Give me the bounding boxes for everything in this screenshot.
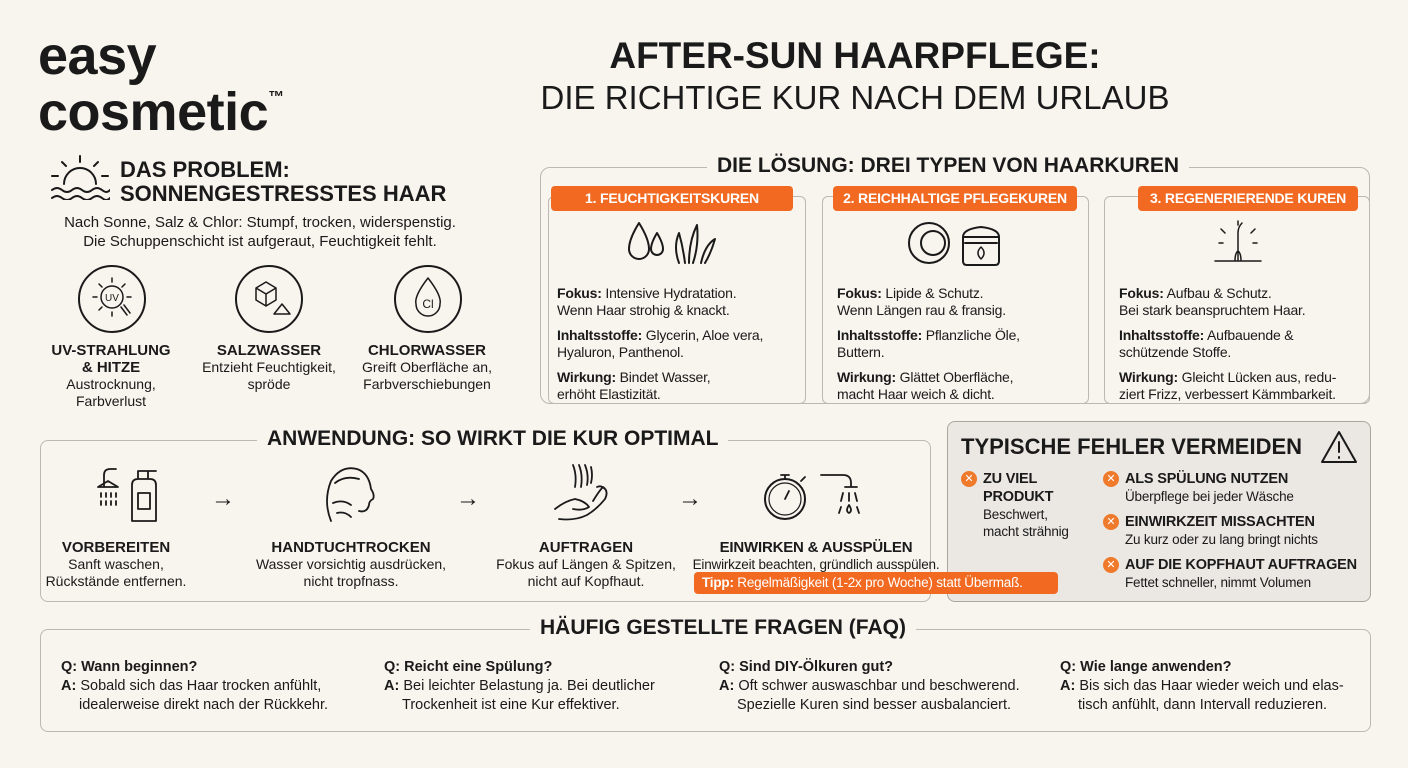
- text: card 2: Buttern.: [837, 344, 884, 360]
- icon: chlorine: Cl: [422, 297, 434, 311]
- heading: solution: DIE LÖSUNG: DREI TYPEN VON HAARKUREN: [717, 154, 1179, 177]
- faq 4: tisch anfühlt, dann Intervall reduzieren.: [1078, 697, 1327, 713]
- text: card 1: Wirkung: Bindet Wasser,: [557, 369, 710, 385]
- faq 1: idealerweise direkt nach der Rückkehr.: [79, 697, 328, 713]
- mistake 1: macht strähnig: [983, 524, 1069, 539]
- mistake 2: Überpflege bei jeder Wäsche: [1125, 489, 1294, 504]
- faq 1: [61, 659, 328, 713]
- card 1: [548, 196, 806, 404]
- mistake 4: AUF DIE KOPFHAUT AUFTRAGEN: [1125, 557, 1357, 573]
- panel: application: [40, 440, 931, 602]
- step 3: AUFTRAGEN: [539, 539, 633, 556]
- tag 3: [1138, 186, 1358, 211]
- text: card 1: Fokus: Intensive Hydratation.: [557, 285, 736, 301]
- arrow 2: →: [456, 485, 480, 512]
- label: UV: UV-STRAHLUNG: [51, 342, 171, 359]
- faq 2: Trockenheit ist eine Kur effektiver.: [402, 697, 620, 713]
- title: DIE RICHTIGE KUR NACH DEM URLAUB: [541, 79, 1169, 116]
- faq 2: [384, 659, 655, 713]
- title: [541, 35, 1169, 116]
- icon: timer and shower: [764, 474, 860, 520]
- logo: easy: [38, 26, 156, 86]
- mistake 1: ✕: [964, 473, 974, 485]
- text: card 2: [837, 285, 1020, 402]
- label: UV: [51, 342, 171, 409]
- mistake 3: EINWIRKZEIT MISSACHTEN: [1125, 514, 1315, 530]
- label: salt: SALZWASSER: [217, 342, 321, 359]
- faq 4: A: Bis sich das Haar wieder weich und elas-: [1060, 678, 1344, 694]
- faq 1: A: Sobald sich das Haar trocken anfühlt,: [61, 678, 321, 694]
- step 3: Fokus auf Längen & Spitzen,: [496, 556, 676, 572]
- text: card 1: [557, 285, 763, 402]
- label: UV: Austrocknung,: [66, 376, 156, 392]
- text: card 3: Inhaltsstoffe: Aufbauende &: [1119, 327, 1293, 343]
- faq 2: A: Bei leichter Belastung ja. Bei deutlicher: [384, 678, 655, 694]
- faq 3: [719, 658, 1020, 713]
- label: chlorine: Farbverschiebungen: [363, 376, 491, 392]
- step 1: Sanft waschen,: [68, 556, 164, 572]
- label: chlorine: [362, 342, 492, 392]
- step 1: VORBEREITEN: [62, 539, 170, 556]
- label: UV: Farbverlust: [76, 393, 146, 409]
- text: card 3: Bei stark beanspruchtem Haar.: [1119, 302, 1305, 318]
- step 3: [496, 464, 676, 589]
- text: card 2: Wirkung: Glättet Oberfläche,: [837, 369, 1013, 385]
- logo: [38, 26, 284, 142]
- step 4: Einwirkzeit beachten, gründlich ausspülen.: [693, 557, 939, 572]
- icon: towel head: [326, 467, 375, 522]
- text: problem description: Nach Sonne, Salz & Chlor: Stumpf, trocken, widerspenstig.: [64, 214, 456, 231]
- text: card 1: Wenn Haar strohig & knackt.: [557, 302, 730, 318]
- step 2: Wasser vorsichtig ausdrücken,: [256, 556, 446, 572]
- icon: hair follicle: [1214, 220, 1262, 262]
- faq 1: Q: Wann beginnen?: [61, 659, 197, 675]
- text: card 1: Hyaluron, Panthenol.: [557, 344, 684, 360]
- panel: mistakes: [947, 421, 1371, 602]
- logo: cosmetic™: [38, 82, 284, 142]
- arrow 1: →: [211, 485, 235, 512]
- heading: problem: DAS PROBLEM:: [120, 157, 290, 182]
- mistake 1: [961, 471, 1069, 539]
- icon: salt: [235, 265, 303, 333]
- panel: solution: [540, 167, 1370, 404]
- title: AFTER-SUN HAARPFLEGE:: [609, 35, 1101, 76]
- mistake 4: [1103, 557, 1357, 590]
- text: card 2: Wenn Längen rau & fransig.: [837, 302, 1006, 318]
- icon: hands applying: [554, 464, 608, 520]
- faq 4: Q: Wie lange anwenden?: [1060, 659, 1231, 675]
- icon: coconut and jar: [908, 222, 1000, 266]
- callout: tip: [694, 572, 1058, 594]
- step 2: HANDTUCHTROCKEN: [271, 539, 431, 556]
- step 3: nicht auf Kopfhaut.: [528, 573, 644, 589]
- icon: warning: [1321, 431, 1357, 463]
- faq 3: A: Oft schwer auswaschbar und beschwerend.: [719, 678, 1020, 694]
- step 1: Rückstände entfernen.: [46, 573, 186, 589]
- label: salt: Entzieht Feuchtigkeit,: [202, 359, 336, 375]
- callout: tip: Tipp: Regelmäßigkeit (1-2x pro Woche) statt Übermaß.: [702, 575, 1023, 590]
- icon: drops and aloe: [628, 222, 716, 264]
- mistake 2: ALS SPÜLUNG NUTZEN: [1125, 471, 1288, 487]
- mistake 3: Zu kurz oder zu lang bringt nichts: [1125, 532, 1318, 547]
- heading: problem: [120, 157, 446, 206]
- tag 2: [833, 186, 1077, 211]
- mistake 1: PRODUKT: [983, 489, 1053, 505]
- faq 2: Q: Reicht eine Spülung?: [384, 659, 552, 675]
- heading: FAQ: HÄUFIG GESTELLTE FRAGEN (FAQ): [540, 616, 906, 639]
- heading: problem: SONNENGESTRESSTES HAAR: [120, 181, 446, 206]
- text: card 3: Wirkung: Gleicht Lücken aus, redu-: [1119, 369, 1336, 385]
- step 2: [256, 467, 446, 589]
- faq 3: Q: Sind DIY-Ölkuren gut?: [719, 659, 893, 675]
- icon: UV: UV: [105, 293, 119, 304]
- label: UV: & HITZE: [82, 359, 140, 376]
- mistake 3: ✕: [1106, 516, 1116, 528]
- step 2: nicht tropfnass.: [304, 573, 398, 589]
- step 4: EINWIRKEN & AUSSPÜLEN: [720, 539, 912, 556]
- step 4: [693, 474, 939, 572]
- step 1: [46, 468, 186, 589]
- icon: sun over waves: [51, 155, 110, 200]
- label: salt: spröde: [248, 376, 290, 392]
- text: problem description: [64, 214, 456, 250]
- text: card 3: Fokus: Aufbau & Schutz.: [1119, 285, 1272, 301]
- mistake 2: [1103, 470, 1294, 504]
- card 2: [822, 196, 1089, 404]
- mistake 4: Fettet schneller, nimmt Volumen: [1125, 575, 1311, 590]
- tag 3: 3. REGENERIERENDE KUREN: [1150, 190, 1346, 206]
- icon: shower and bottle: [97, 468, 157, 522]
- tag 1: 1. FEUCHTIGKEITSKUREN: [585, 190, 759, 206]
- panel: FAQ: [40, 629, 1371, 732]
- tag 1: [551, 186, 793, 211]
- label: chlorine: CHLORWASSER: [368, 342, 486, 359]
- text: card 1: Inhaltsstoffe: Glycerin, Aloe vera,: [557, 327, 763, 343]
- text: card 2: Inhaltsstoffe: Pflanzliche Öle,: [837, 327, 1020, 343]
- mistake 1: ZU VIEL: [983, 471, 1037, 487]
- label: salt: [202, 342, 336, 392]
- text: card 3: [1119, 285, 1336, 402]
- mistake 4: ✕: [1106, 559, 1116, 571]
- mistake 3: [1103, 514, 1318, 547]
- tag 2: 2. REICHHALTIGE PFLEGEKUREN: [843, 190, 1067, 206]
- mistake 1: Beschwert,: [983, 507, 1048, 522]
- text: problem description: Die Schuppenschicht ist aufgeraut, Feuchtigkeit fehlt.: [83, 233, 437, 250]
- mistake 2: ✕: [1106, 473, 1116, 485]
- faq 3: Spezielle Kuren sind besser ausbalanciert.: [737, 697, 1011, 713]
- text: card 2: Fokus: Lipide & Schutz.: [837, 285, 983, 301]
- arrow 3: →: [678, 485, 702, 512]
- icon: UV: [78, 265, 146, 333]
- text: card 3: schützende Stoffe.: [1119, 344, 1231, 360]
- text: card 3: ziert Frizz, verbessert Kämmbarkeit.: [1119, 386, 1336, 402]
- heading: mistakes: TYPISCHE FEHLER VERMEIDEN: [961, 434, 1302, 459]
- text: card 1: erhöht Elastizität.: [557, 386, 661, 402]
- panel: problem: [51, 155, 492, 409]
- faq 4: [1060, 659, 1344, 713]
- icon: chlorine: [394, 265, 462, 333]
- heading: application: ANWENDUNG: SO WIRKT DIE KUR OPTIMAL: [267, 427, 718, 450]
- label: chlorine: Greift Oberfläche an,: [362, 359, 492, 375]
- text: card 2: macht Haar weich & dicht.: [837, 386, 995, 402]
- card 3: [1104, 196, 1370, 404]
